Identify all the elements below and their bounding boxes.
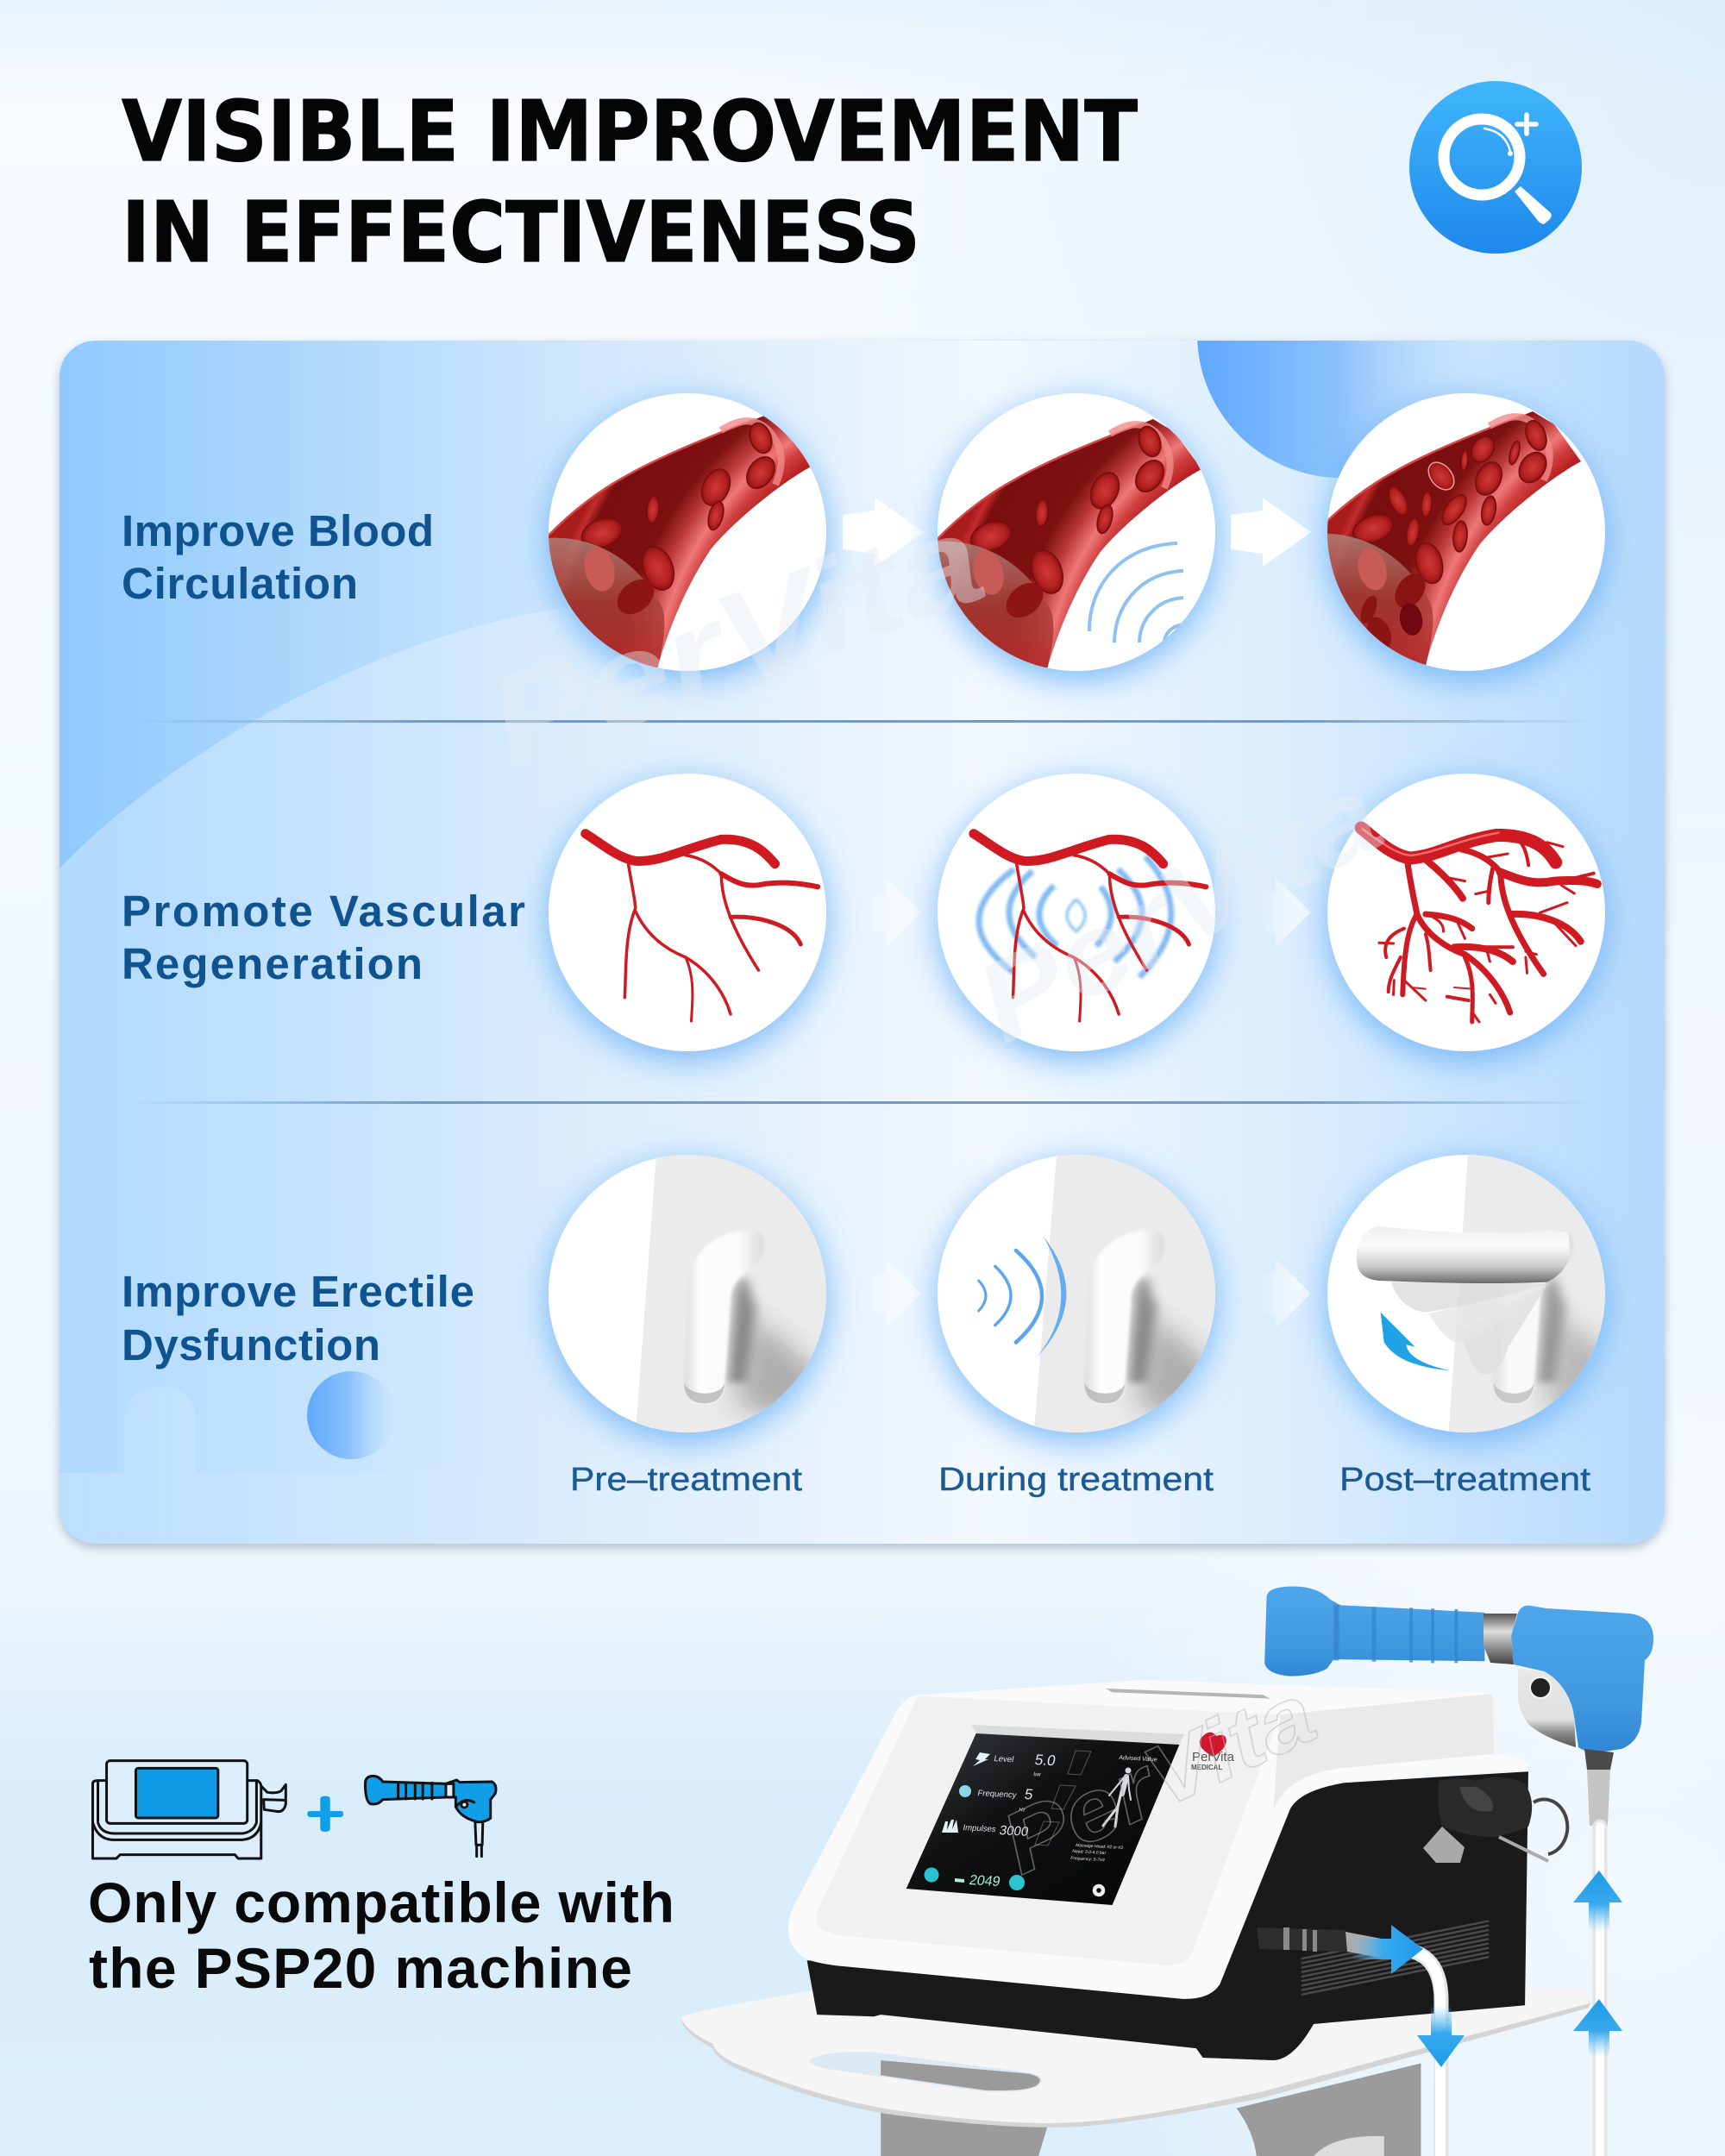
handpiece shaft <box>1264 1587 1484 1677</box>
arrow <box>871 878 921 947</box>
machine vents <box>1302 1921 1488 1995</box>
icon: magnifying glass <box>1409 81 1582 254</box>
row 3 anatomy: during <box>938 1147 1247 1434</box>
icon: upward arrow <box>1381 1313 1451 1370</box>
title <box>122 83 1138 281</box>
arrow <box>871 1259 921 1328</box>
machine screen <box>971 1725 1184 1745</box>
screen readouts: Level <box>993 1754 1014 1764</box>
watermark: PerVita <box>988 1665 1329 1893</box>
title: VISIBLE IMPROVEMENT <box>122 83 1138 180</box>
icon: shockwave arcs <box>1089 543 1183 642</box>
screen readouts: Advised Value <box>1119 1755 1157 1763</box>
row 2 vessels: during <box>938 774 1215 1051</box>
icon: machine and handpiece line drawing <box>92 1761 496 1858</box>
heading: improve blood circulation <box>122 506 434 608</box>
screen readouts <box>925 1751 1157 1895</box>
screen readouts: Impulses <box>962 1823 997 1834</box>
heading: improve erectile dysfunction <box>122 1267 474 1369</box>
screen readouts: Massage Head: #2 or #3 <box>1076 1843 1124 1851</box>
row 1 blood vessel: before <box>535 393 826 690</box>
text: compatibility note: Only compatible with <box>88 1871 674 1934</box>
machine white shell <box>788 1680 1528 1999</box>
row 3 anatomy: after <box>1327 1147 1661 1434</box>
screen readouts: bar <box>1033 1772 1041 1777</box>
screen readouts: 2049 <box>968 1872 1001 1890</box>
screen readouts: 5 <box>1023 1785 1035 1802</box>
brand text: PerVita <box>1192 1750 1235 1764</box>
screen readouts: Frequency: 5-7Hz <box>1070 1856 1106 1863</box>
screen readouts: Hz <box>1019 1808 1026 1813</box>
text: compatibility note <box>88 1871 674 2000</box>
heading: improve blood circulation: Improve Blood <box>122 506 434 555</box>
watermark: PerVita <box>957 750 1401 1067</box>
screen readouts: Frequency <box>976 1789 1018 1800</box>
cables <box>1396 1827 1600 2156</box>
arrow <box>1261 1259 1311 1328</box>
machine black base <box>807 1771 1528 2060</box>
brand text <box>1191 1750 1235 1771</box>
icon: shockwave arcs <box>979 1236 1066 1358</box>
row 2 vessels: before <box>549 774 826 1051</box>
heading: promote vascular regeneration <box>122 887 525 988</box>
trolley tray <box>681 1989 1590 2128</box>
watermark <box>468 485 1401 1067</box>
brand text: MEDICAL <box>1191 1764 1223 1771</box>
screen readouts: 3000 <box>998 1823 1030 1839</box>
cable connector <box>1257 1927 1390 1959</box>
screen readouts: Need: 3.0-4.0 bar <box>1072 1849 1107 1856</box>
trolley stand <box>881 2059 1421 2156</box>
row 1 blood vessel: after <box>1303 393 1605 686</box>
handpiece head <box>1484 1606 1653 1826</box>
key switch <box>1423 1777 1567 1863</box>
title: IN EFFECTIVENESS <box>122 184 920 281</box>
heading: promote vascular regeneration: Regeneration <box>122 939 423 988</box>
arrow <box>1231 498 1311 567</box>
watermark: PerVita <box>468 485 1000 796</box>
panel: treatment comparison <box>60 190 1665 1544</box>
arrow <box>843 498 924 567</box>
caption: post-treatment: Post–treatment <box>1339 1462 1590 1498</box>
brand logo <box>1200 1733 1226 1757</box>
row 1 blood vessel: during <box>924 393 1215 693</box>
row 2 vessels: after <box>1327 774 1605 1051</box>
heading: improve erectile dysfunction: Improve Erectile <box>122 1267 474 1316</box>
caption: during treatment: During treatment <box>938 1462 1214 1498</box>
heading: improve erectile dysfunction: Dysfunction <box>122 1320 380 1369</box>
heading: promote vascular regeneration: Promote Vascular <box>122 887 525 936</box>
flow arrows <box>1350 1871 1622 2067</box>
heading: improve blood circulation: Circulation <box>122 559 358 608</box>
arrow <box>1261 878 1311 947</box>
device: shockwave machine on trolley <box>681 1587 1653 2156</box>
text: compatibility note: the PSP20 machine <box>89 1936 632 2000</box>
caption: pre-treatment: Pre–treatment <box>570 1462 802 1498</box>
row 3 anatomy: before <box>549 1147 861 1434</box>
icon: concentric shockwave <box>979 856 1171 977</box>
screen readouts: 5.0 <box>1033 1751 1057 1769</box>
